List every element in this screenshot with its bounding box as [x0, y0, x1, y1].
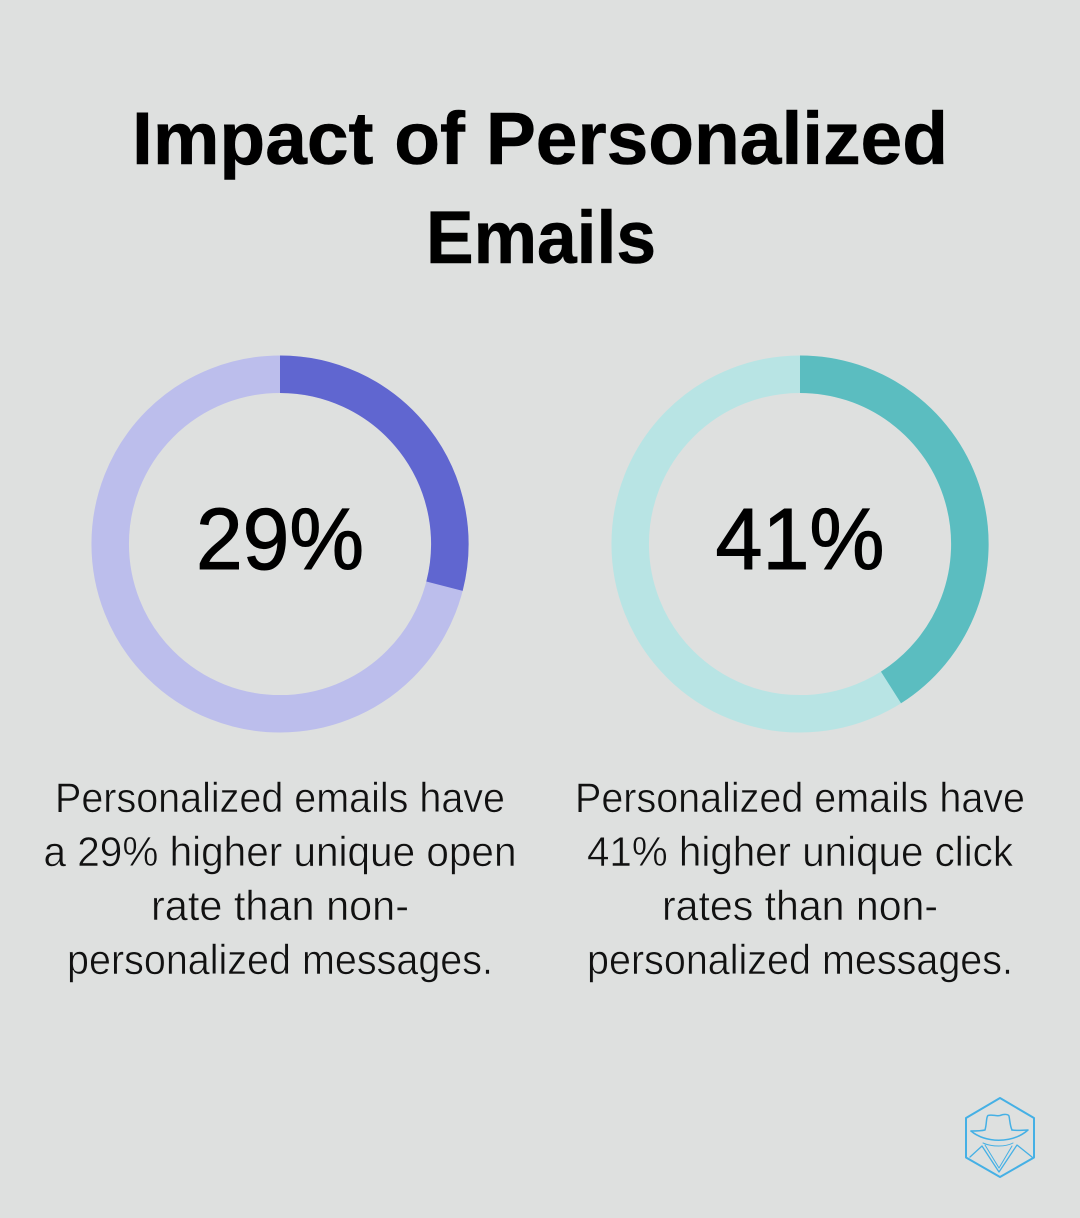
panel: 41% click rate: [575, 374, 1025, 983]
title: Impact of Personalized: [132, 97, 948, 180]
donut chart: 41%: [630, 374, 970, 714]
description: click rate: 41% higher unique click: [587, 828, 1013, 875]
description: open rate: personalized messages.: [67, 936, 493, 983]
description: click rate: personalized messages.: [587, 936, 1013, 983]
value: 29%: 29%: [196, 491, 364, 588]
description: click rate: [575, 774, 1025, 983]
description: click rate: Personalized emails have: [575, 774, 1025, 821]
title: [132, 97, 948, 279]
icon: hexagon logo with hat: [966, 1098, 1034, 1177]
value: 41%: 41%: [716, 491, 884, 588]
title: Emails: [426, 196, 656, 279]
description: open rate: [44, 774, 516, 983]
description: open rate: a 29% higher unique open: [44, 828, 516, 875]
description: open rate: Personalized emails have: [55, 774, 505, 821]
description: open rate: rate than non-: [151, 882, 409, 929]
donut chart: 29%: [110, 374, 450, 714]
description: click rate: rates than non-: [662, 882, 938, 929]
panel: 29% open rate: [44, 374, 516, 983]
